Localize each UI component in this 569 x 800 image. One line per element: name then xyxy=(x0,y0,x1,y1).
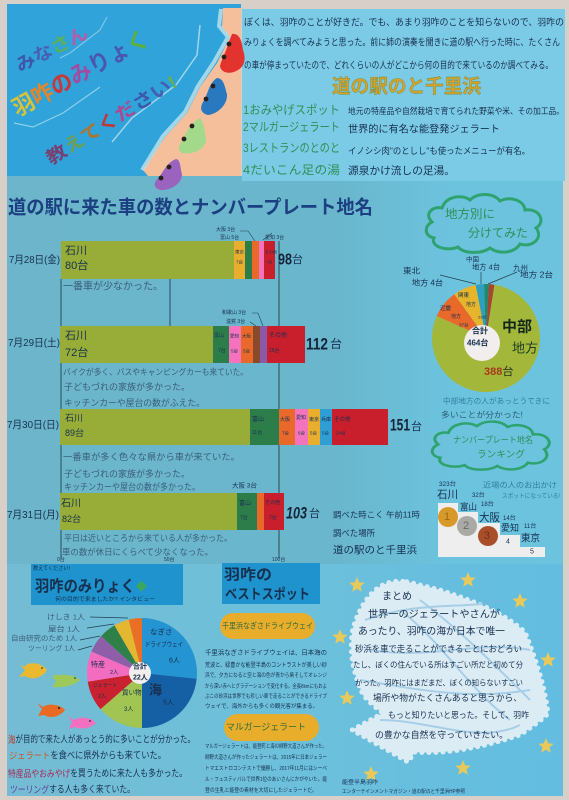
pill heading: Chirihama Nagisa Driveway xyxy=(220,613,315,639)
label: July 31 date and total: 平日は近いところから来ている人が多かった。 xyxy=(64,533,232,543)
station features list: 世界的に有名な能登発ジェラート xyxy=(348,122,500,136)
label: July 28 date and total: 台 xyxy=(292,252,303,266)
ranking podium: 3 xyxy=(484,530,490,542)
station features list: 1おみやげスポット xyxy=(243,103,340,117)
bar: July 29: 石川 xyxy=(65,330,87,342)
bar: July 30: 24台 xyxy=(336,430,346,436)
pill heading: Malga gelato: マルガージェラート xyxy=(226,722,306,732)
pie chart: cars by region: 388台 xyxy=(484,364,513,378)
ranking podium: 5 xyxy=(530,548,534,556)
panel: introduction text card xyxy=(242,9,565,181)
banner: best spots xyxy=(222,563,320,604)
station features list: 源泉かけ流しの足湯。 xyxy=(348,164,455,177)
bar: July 31: 富山 xyxy=(239,499,251,507)
finding text: 多いことが分かった! xyxy=(441,410,523,420)
text block: driveway description: 浜で、夕方になると空と海の色が青から紫そしてオレンジ xyxy=(205,671,327,679)
pie chart leader labels: けしき 1人 xyxy=(47,612,86,622)
bar: July 29: 72台 xyxy=(65,345,88,359)
pie chart leader labels: ツーリング 1人 xyxy=(28,644,75,652)
pie chart: visit purposes: ジェラート xyxy=(93,683,117,689)
pie chart: visit purposes: 3人 xyxy=(124,706,133,713)
label: July 29 date and total: 7月29日(土) xyxy=(8,336,60,349)
label: July 30 date and total: 151 xyxy=(390,416,410,434)
bar: July 29: 5台 xyxy=(231,348,239,354)
conclusion text: あったり、羽咋の海が日本で唯一 xyxy=(358,624,505,638)
bar: July 29: 7台 xyxy=(218,347,226,354)
source credit: 能登半島羽咋 xyxy=(342,778,379,786)
ranking podium: 石川 xyxy=(437,489,458,501)
bar: July 30: 大阪 xyxy=(280,416,290,423)
icon: orange fish xyxy=(37,703,65,717)
pie chart leader labels: 地方 4台 xyxy=(412,278,443,288)
bar: July 30: 兵庫 xyxy=(321,416,331,423)
ranking podium: 4 xyxy=(506,538,510,546)
pie chart: visit purposes: なぎさ xyxy=(150,626,172,636)
text block: driveway description: 千里浜なぎさドライブウェイは、日本海の xyxy=(205,648,327,656)
text block: driveway description: ぶこの砂浜は世界でも珍しい車で走ることができるドライブ xyxy=(205,692,327,700)
pie chart leader labels: 屋台 1人 xyxy=(48,624,81,634)
label: July 31 date and total xyxy=(7,504,320,557)
bar: July 28: 7台 xyxy=(236,258,244,266)
cloud heading: by region xyxy=(426,194,541,252)
map: blue prefecture with dots xyxy=(201,78,227,115)
axis labels: 0台 xyxy=(57,556,65,563)
pie chart: visit purposes: 2人 xyxy=(110,670,119,676)
text block: gelato description: ル・フェスティバルで世界1位のあいさんにかがやいた。能 xyxy=(205,775,327,783)
banner: best spots: 羽咋の xyxy=(224,566,272,584)
bar: July 30: 富山 xyxy=(252,415,264,423)
ranking podium xyxy=(437,480,545,557)
ranking podium: 愛知 xyxy=(501,522,519,533)
label: July 31 date and total: 台 xyxy=(309,506,320,520)
bar: July 30: その他 xyxy=(334,415,351,423)
bar: July 31: 82台 xyxy=(62,513,81,524)
text block: survey time and place: 道の駅のと千里浜 xyxy=(333,544,417,556)
bar: July 29: その他 xyxy=(269,331,287,339)
cloud heading: by region: 地方別に xyxy=(445,206,495,221)
conclusion text: 場所や物がたくさんあると思うから、 xyxy=(373,692,522,703)
bar: July 30: 愛知 xyxy=(296,414,306,421)
station features list: 4だいこん足の湯 xyxy=(243,163,340,177)
conclusion text: たし、ぼくの住んでいる所はすごい所だと初めて分 xyxy=(353,660,523,670)
conclusion text xyxy=(353,590,529,740)
ranking podium: 大阪 xyxy=(479,510,500,524)
pie chart leader labels xyxy=(403,254,553,288)
ranking podium: 東京 xyxy=(521,532,540,544)
bar: July 31: 7台 xyxy=(240,514,248,521)
ranking podium: 32台 xyxy=(472,491,485,499)
source credit: エンターテインメントマガジン・道の駅のと千里浜HP参照 xyxy=(342,788,465,795)
bar: July 31: 大阪 3台 xyxy=(232,480,257,490)
conclusion text: もっと知りたいと思った。そして、羽咋 xyxy=(388,710,529,720)
bar: July 30: 石川 xyxy=(65,413,83,423)
text block: gelato description: マルガージェラートは、能登町と海の柳野大道さんが作った。 xyxy=(205,742,327,750)
text block: interview findings: ツーリングする人も多く来ていた。 xyxy=(10,784,135,796)
bar: July 28: 富山 5台 xyxy=(220,234,239,241)
pie chart: cars by region: 37台 xyxy=(459,322,469,328)
conclusion text: かった。羽咋にはまだまだ、ぼくの知らないすごい xyxy=(355,678,523,688)
pie chart: visit purposes: 2人 xyxy=(98,694,107,700)
banner: charm of Hakui: 何の目的で来ましたか? インタビュー xyxy=(55,595,155,603)
ranking podium: 1 xyxy=(444,511,450,523)
panel: conclusion shell xyxy=(351,581,548,762)
text block: driveway description: から深い赤へとグラデーションで変化する。全長8kmにもおよ xyxy=(205,682,327,690)
ranking podium: 2 xyxy=(463,520,469,532)
pie chart leader labels xyxy=(11,612,128,652)
pie chart: cars by region: 464台 xyxy=(467,338,488,348)
finding text: 中部地方の人があっとうてきに xyxy=(443,396,550,406)
text block: gelato description: トマエストロコンテストで優勝し、2017年11月にはシーベ xyxy=(205,764,327,772)
bar: July 28: 80台 xyxy=(65,258,88,272)
pie chart: cars by region: 地方 xyxy=(466,301,476,308)
bar: July 30: 6台 xyxy=(298,430,306,436)
conclusion text: 世界一のジェラートやさんが xyxy=(368,608,500,620)
ranking podium: 富山 xyxy=(460,501,477,512)
station features list xyxy=(243,103,564,177)
bar: July 30: 5台 xyxy=(322,430,330,436)
pie chart: cars by region: 地方 xyxy=(451,313,461,320)
text block: interview findings: 特産品やおみやげを買うために来た人も多かった。 xyxy=(8,768,187,780)
pie chart leader labels: 中国 xyxy=(466,254,479,264)
bar: July 30 xyxy=(60,409,388,445)
text block: gelato description: 登の生乳と能登の素材を大切にしたジェラートだ。 xyxy=(205,786,317,794)
pie chart: visit purposes: ドライブウェイ xyxy=(145,640,183,648)
heading: title lettering: 羽咋のみりょく xyxy=(8,25,153,121)
pie chart: cars by region: 地方 xyxy=(512,340,538,356)
bar: July 28: 大阪 3台 xyxy=(216,226,235,233)
text block: gelato description: 柳野大道さんが作ったジェラートは、2015年に日本ジェラー xyxy=(205,753,327,761)
pie chart leader labels: 地方 4台 xyxy=(472,262,500,272)
bar: July 29: 滋賀 3台 xyxy=(226,318,245,325)
bar: July 29: 大阪 xyxy=(242,332,251,340)
label: July 29 date and total: キッチンカーや屋台の数がふえた。 xyxy=(64,397,205,408)
bar: July 29: 富山 xyxy=(214,332,224,339)
text block: gelato description xyxy=(205,742,327,794)
ranking note: 近場の人のお出かけ xyxy=(483,480,557,490)
bar: July 31: 7台 xyxy=(269,514,277,521)
heading: station name: 道の駅のと千里浜 xyxy=(332,76,481,98)
bar: July 28: 石川 xyxy=(65,245,87,257)
conclusion text: まとめ xyxy=(382,590,412,602)
bar: July 30: 89台 xyxy=(65,427,84,438)
label: July 30 date and total: キッチンカーや屋台の数が多かった。 xyxy=(64,481,200,492)
ranking podium: 18台 xyxy=(481,500,494,508)
bar: July 29: 15台 xyxy=(269,347,280,354)
panel: number plate ranking xyxy=(432,422,560,557)
label: July 30 date and total: 一番車が多く色々な県から車が来ていた。 xyxy=(63,451,240,462)
label: July 28 date and total: 98 xyxy=(278,252,292,268)
bar: July 28: 東京 xyxy=(235,248,244,256)
ranking note: スポットになっている! xyxy=(502,492,560,500)
bar: July 29 xyxy=(60,309,305,363)
pie chart: cars by region: 関東 xyxy=(458,291,470,299)
label: July 29 date and total: バイクが多く、バスやキャンピングカーも来ていた。 xyxy=(63,367,248,377)
conclusion text: 砂浜を車で走ることができることにおどろい xyxy=(355,643,522,654)
pie chart: visit purposes: 海 xyxy=(149,682,162,698)
cloud heading: ranking xyxy=(432,422,549,470)
ranking note xyxy=(483,480,560,500)
text block: interview findings: 海が目的で来た人があっとう的に多いことが分かった。 xyxy=(8,734,195,746)
text block: survey time and place: 調べた場所 xyxy=(333,528,375,538)
pie chart: visit purposes: 合計 xyxy=(133,662,147,670)
station features list: イノシシ肉"のとしし"も使ったメニューが有名。 xyxy=(348,145,530,156)
bar: July 29: 愛知 xyxy=(230,332,239,340)
axis labels: 50台 xyxy=(164,556,175,563)
shell ink streaks xyxy=(360,600,530,733)
pie chart: cars by region: 中部 xyxy=(502,318,532,336)
finding text xyxy=(441,396,550,420)
panel: regional breakdown xyxy=(403,194,553,420)
station features list: 3レストランのとのと xyxy=(243,141,340,155)
panel: attractions interview xyxy=(8,564,197,796)
panel: title card with sea and map xyxy=(7,4,245,176)
map: purple prefecture with dots xyxy=(155,159,182,190)
pie chart leader labels: 地方 2台 xyxy=(520,270,553,280)
bar: July 31 xyxy=(60,480,284,530)
pie chart leader labels: 東北 xyxy=(403,266,420,276)
label: July 28 date and total xyxy=(9,252,303,292)
text block: survey time and place: 調べた時こく 午前11時 xyxy=(333,510,420,520)
pill heading: Malga gelato xyxy=(224,714,319,741)
map: green prefecture with dots xyxy=(179,118,206,153)
station features list: 2マルガージェラート xyxy=(243,120,340,134)
axis labels: 100台 xyxy=(272,556,285,563)
pie chart: cars by region: 29台 xyxy=(478,314,486,320)
bar: July 28: 愛知 3台 xyxy=(265,234,284,241)
text block: driveway description: 荒波と、緑豊かな能登半島のコントラストが美しい砂 xyxy=(205,661,327,669)
pie chart: cars by region: 合計 xyxy=(472,326,488,336)
pie chart: visit purposes: 22人 xyxy=(133,674,148,682)
label: July 30 date and total: 子どもづれの家族が多かった。 xyxy=(64,468,190,479)
cloud heading: by region: 分けてみた xyxy=(468,226,528,240)
bar: July 30: 11台 xyxy=(252,429,262,436)
label: July 29 date and total xyxy=(8,334,342,408)
text block: driveway description: ウェイで、海外からも多くの観光客が集まる。 xyxy=(205,702,318,710)
ranking podium: 11台 xyxy=(524,522,536,530)
ranking podium: 14台 xyxy=(503,514,516,522)
pie chart leader labels: 九州 xyxy=(513,264,528,272)
bar: July 29: 5台 xyxy=(243,348,251,354)
bar: July 29: 和歌山 3台 xyxy=(222,309,246,316)
banner: charm of Hakui: ◆ xyxy=(136,580,147,593)
label: July 30 date and total: 7月30日(日) xyxy=(7,419,59,431)
label: July 31 date and total: 103 xyxy=(286,504,307,522)
cloud heading: ranking: ランキング xyxy=(477,448,526,460)
heading: title lettering xyxy=(8,23,181,168)
pie chart: visit purposes: 特産 xyxy=(91,660,105,668)
axis labels xyxy=(57,556,285,563)
axis grid lines xyxy=(61,241,279,558)
pie chart leader labels: 自由研究のため 1人 xyxy=(11,634,77,642)
label: July 29 date and total: 台 xyxy=(330,336,342,351)
label: July 31 date and total: 車の数が休日にくらべて少なくなった。 xyxy=(62,547,213,557)
ranking podium: 323台 xyxy=(439,480,456,488)
text block: driveway description xyxy=(205,648,327,710)
banner: best spots: ベストスポット xyxy=(225,586,310,602)
bar: July 28: その他 xyxy=(265,248,277,254)
banner: charm of Hakui: 教えてください! xyxy=(33,564,70,572)
label: July 30 date and total xyxy=(7,416,422,492)
label: July 28 date and total: 一番車が少なかった。 xyxy=(63,280,163,292)
bar: July 31: その他 xyxy=(265,499,280,506)
source credit xyxy=(342,778,465,795)
heading: title lettering: 教えてください! xyxy=(43,72,181,168)
label: July 29 date and total: 子どもづれの家族が多かった。 xyxy=(64,381,190,392)
conclusion text: の豊かな自然を守っていきたい。 xyxy=(375,729,508,740)
icon: yellow fish xyxy=(19,663,47,678)
icon: pink fish xyxy=(68,716,96,729)
text block: interview findings: ジェラートを食べに県外からも来ていた。 xyxy=(9,750,166,762)
map: red prefecture with dots xyxy=(220,34,245,73)
label: July 28 date and total: 7月28日(金) xyxy=(9,253,60,266)
chart: stacked bars of cars per day xyxy=(7,226,422,563)
text block: survey time and place xyxy=(333,510,420,556)
bar: July 28 xyxy=(61,226,284,279)
pie chart: cars by region: 近畿 xyxy=(440,304,452,312)
pie chart: visit purposes: 6人 xyxy=(169,656,180,664)
pie chart: visit purposes xyxy=(87,618,197,728)
bar: July 30: 5台 xyxy=(310,430,318,436)
label: July 30 date and total: 台 xyxy=(411,419,422,433)
bar: July 30: 東京 xyxy=(309,416,319,423)
panel: main poster paper xyxy=(7,176,563,796)
text block: interview findings xyxy=(8,734,195,796)
banner: charm of Hakui: 羽咋のみりょく xyxy=(35,578,135,596)
bar: July 30: 7台 xyxy=(282,430,290,436)
banner: charm of Hakui xyxy=(31,564,183,605)
pie chart: visit purposes: 買い物 xyxy=(122,688,142,696)
panel: best spots xyxy=(205,563,327,794)
heading: title lettering: みなさん xyxy=(12,23,91,76)
pie chart: cars by region xyxy=(432,284,540,392)
label: July 31 date and total: 7月31日(月) xyxy=(7,509,59,521)
icon: green fish xyxy=(52,675,80,687)
label: July 29 date and total: 112 xyxy=(306,334,328,354)
pill heading: Chirihama Nagisa Driveway: 千里浜なぎさドライブウェイ xyxy=(222,620,313,630)
decorative stars xyxy=(332,572,556,781)
cloud heading: ranking: ナンバープレート地名 xyxy=(453,434,533,445)
heading: chart title: 道の駅に来た車の数とナンバープレート地名 xyxy=(8,196,373,218)
intro paragraph xyxy=(244,16,564,72)
bar: July 31: 石川 xyxy=(61,498,81,510)
bar: July 28: 7台 xyxy=(266,258,272,264)
pie chart: visit purposes: 5人 xyxy=(163,698,174,706)
